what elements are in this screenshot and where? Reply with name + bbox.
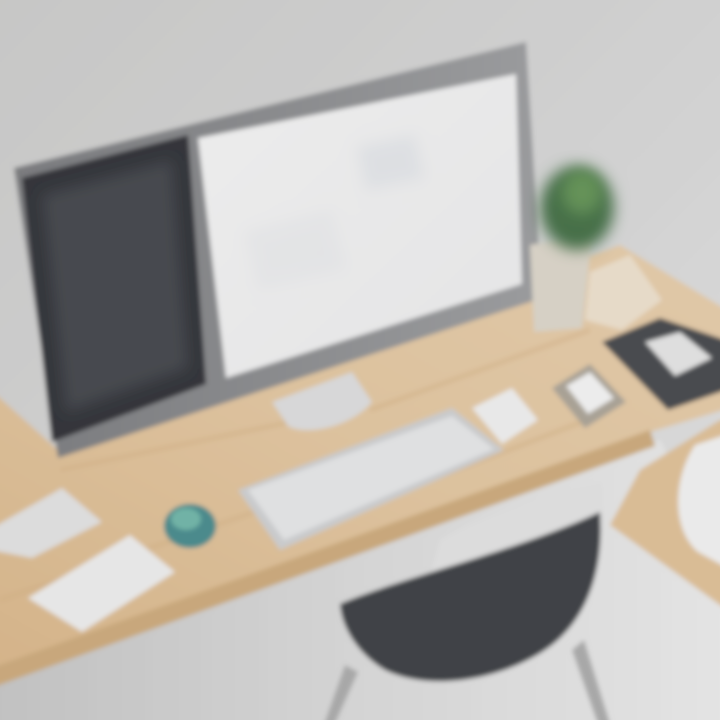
wood grain [0,330,600,600]
dark panel [22,135,206,442]
keyboard [238,408,504,550]
right tablet / tray [585,255,720,410]
teal object [164,504,216,548]
notepad lower [28,535,175,632]
plant and pot [530,166,614,332]
chair [322,482,612,720]
small desk items [472,364,626,444]
screen detail [244,134,425,290]
right side desk section [610,420,720,615]
floor [0,440,720,720]
monitor [14,42,542,458]
desk top [0,245,720,692]
monitor frame [14,42,542,458]
white screen [198,74,522,378]
notepad upper [0,488,102,558]
desk front edge [0,430,655,692]
monitor stand [272,372,372,430]
